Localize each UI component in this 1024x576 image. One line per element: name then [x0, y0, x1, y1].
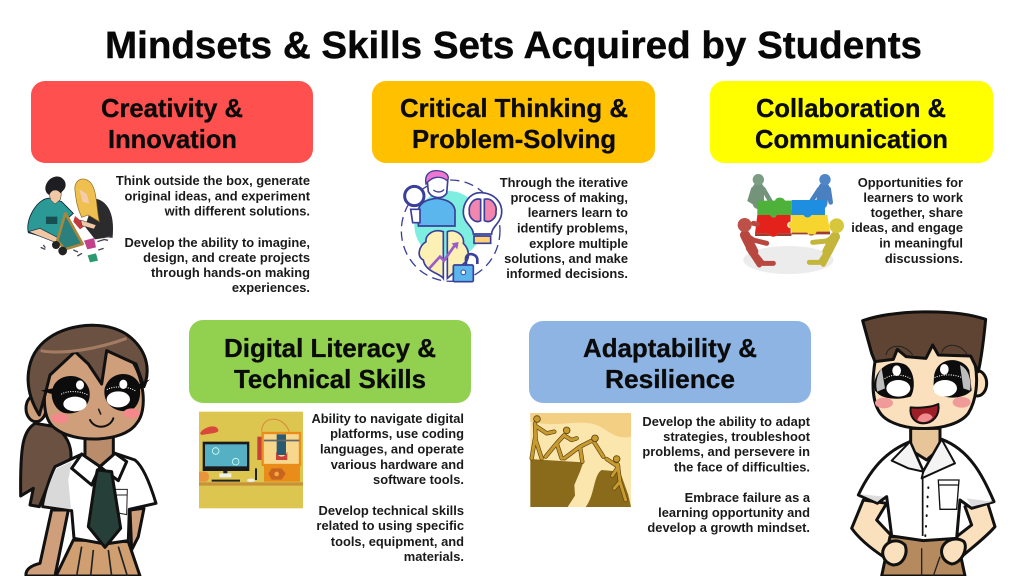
text block: critical thinking description: identify problems,	[517, 220, 628, 236]
text block: critical thinking description: solutions, and make	[504, 251, 628, 266]
tie	[88, 470, 121, 547]
cheeks	[52, 413, 68, 423]
hair	[28, 325, 147, 415]
text block: creativity description	[116, 173, 311, 295]
heading: digital literacy and technical skills: Digital Literacy &	[224, 333, 436, 363]
icon: computer and 3D printer	[199, 412, 303, 508]
text block: adaptability description: problems, and persevere in	[642, 444, 810, 459]
text block: adaptability description: Embrace failure as a	[685, 490, 811, 505]
text block: digital literacy description: tools, equipment, and	[331, 534, 464, 549]
heading: critical thinking and problem-solving	[372, 81, 655, 163]
ponytail	[21, 423, 71, 507]
ear	[26, 395, 46, 422]
text block: creativity description: original ideas, and experiment	[124, 188, 311, 204]
heading: digital literacy and technical skills: Technical Skills	[234, 364, 426, 394]
text block: digital literacy description: various hardware and	[331, 457, 464, 472]
text block: creativity description: Think outside the box, generate	[116, 173, 310, 188]
trousers	[882, 537, 965, 576]
text block: adaptability description: develop a growth mindset.	[647, 520, 810, 535]
ear	[968, 371, 987, 396]
neck	[85, 437, 113, 467]
girl	[85, 198, 113, 239]
text block: creativity description: Develop the ability to imagine,	[124, 235, 310, 250]
panel: creativity and innovation	[28, 81, 313, 295]
cheeks	[875, 398, 893, 408]
eyes	[41, 376, 90, 413]
text block: adaptability description: learning opportunity and	[658, 505, 810, 520]
text block: collaboration description: together, share	[871, 205, 963, 220]
green figure	[750, 188, 772, 205]
heading: collaboration and communication	[710, 81, 993, 163]
text block: critical thinking description: informed decisions.	[506, 266, 628, 281]
text block: adaptability description: strategies, troubleshoot	[663, 429, 811, 444]
heading: creativity and innovation	[31, 81, 313, 163]
robot	[73, 216, 86, 229]
text block: collaboration description	[851, 175, 964, 266]
text block: creativity description: with different solutions.	[164, 204, 310, 218]
panel: critical thinking and problem-solving	[372, 81, 655, 282]
character: girl student	[21, 325, 156, 576]
text block: digital literacy description: materials.	[404, 549, 464, 564]
heading: adaptability and resilience	[529, 321, 811, 403]
text block: creativity description: experiences.	[232, 280, 310, 295]
heading: critical thinking and problem-solving: Critical Thinking &	[400, 93, 628, 123]
arms	[852, 500, 902, 557]
text block: digital literacy description: software tools.	[373, 472, 464, 487]
mouth	[910, 404, 939, 423]
shirt	[43, 453, 156, 544]
heading: collaboration and communication: Collaboration &	[756, 93, 946, 123]
text block: digital literacy description: Ability to navigate digital	[311, 411, 464, 426]
climbers fill	[532, 423, 626, 500]
text block: collaboration description: ideas, and engage	[851, 220, 963, 235]
puzzle	[757, 198, 795, 218]
collar	[72, 453, 127, 485]
text block: creativity description: design, and create projects	[143, 250, 310, 265]
boy	[28, 198, 73, 242]
head	[873, 343, 977, 429]
red figure	[743, 223, 773, 265]
head	[44, 347, 143, 439]
fists	[883, 541, 906, 565]
heading: collaboration and communication: Communication	[755, 124, 948, 154]
button placket and pocket	[920, 478, 925, 536]
climbers outline	[532, 423, 626, 500]
text block: collaboration description: in meaningful	[879, 236, 963, 250]
panel: adaptability and resilience	[529, 321, 811, 535]
pocket	[115, 489, 127, 515]
icon: four figures joining puzzle pieces	[738, 174, 844, 274]
skirt	[56, 540, 140, 576]
title: Mindsets & Skills Sets Acquired by Students	[105, 25, 922, 67]
text block: collaboration description: Opportunities for	[858, 175, 963, 190]
heading: adaptability and resilience: Resilience	[605, 364, 735, 394]
heading: creativity and innovation: Innovation	[108, 124, 237, 154]
icon: climbers helping each other across a cliff	[530, 413, 631, 507]
text block: critical thinking description	[500, 175, 628, 281]
collar	[892, 439, 955, 478]
arms and legs skin	[26, 510, 68, 576]
character: boy student	[852, 312, 995, 576]
text block: critical thinking description: process of making,	[511, 190, 628, 205]
eyes	[874, 363, 914, 399]
text block: digital literacy description: Develop technical skills	[319, 503, 464, 518]
text block: adaptability description: the face of difficulties.	[674, 460, 810, 474]
nose and mouth	[99, 409, 101, 414]
text block: digital literacy description: related to using specific	[316, 518, 464, 533]
heading: critical thinking and problem-solving: Problem-Solving	[412, 124, 616, 154]
shirt	[858, 439, 994, 541]
heading: creativity and innovation: Creativity &	[101, 93, 243, 123]
neck	[911, 428, 940, 460]
text block: adaptability description	[642, 414, 811, 535]
text block: creativity description: through hands-on making	[151, 265, 310, 280]
panel: collaboration and communication	[710, 81, 993, 274]
text block: adaptability description: Develop the ability to adapt	[642, 414, 811, 429]
text block: collaboration description: discussions.	[885, 251, 963, 266]
text block: critical thinking description: explore multiple	[529, 236, 628, 251]
yellow figure	[809, 235, 837, 264]
text block: critical thinking description: learners learn to	[528, 205, 628, 220]
panel: digital literacy and technical skills	[189, 320, 471, 564]
text block: digital literacy description	[311, 411, 464, 564]
icon: thinking person, brain and lightbulb	[401, 171, 502, 282]
icon: students building a robot	[28, 176, 113, 262]
text block: digital literacy description: languages, and operate	[320, 442, 464, 456]
text block: critical thinking description: Through the iterative	[500, 175, 628, 190]
heading: digital literacy and technical skills	[189, 320, 471, 403]
text block: collaboration description: learners to work	[863, 190, 964, 205]
blue figure	[811, 188, 831, 203]
hair	[863, 312, 986, 372]
heading: adaptability and resilience: Adaptability &	[583, 333, 757, 363]
text block: digital literacy description: platforms, use coding	[330, 426, 464, 441]
